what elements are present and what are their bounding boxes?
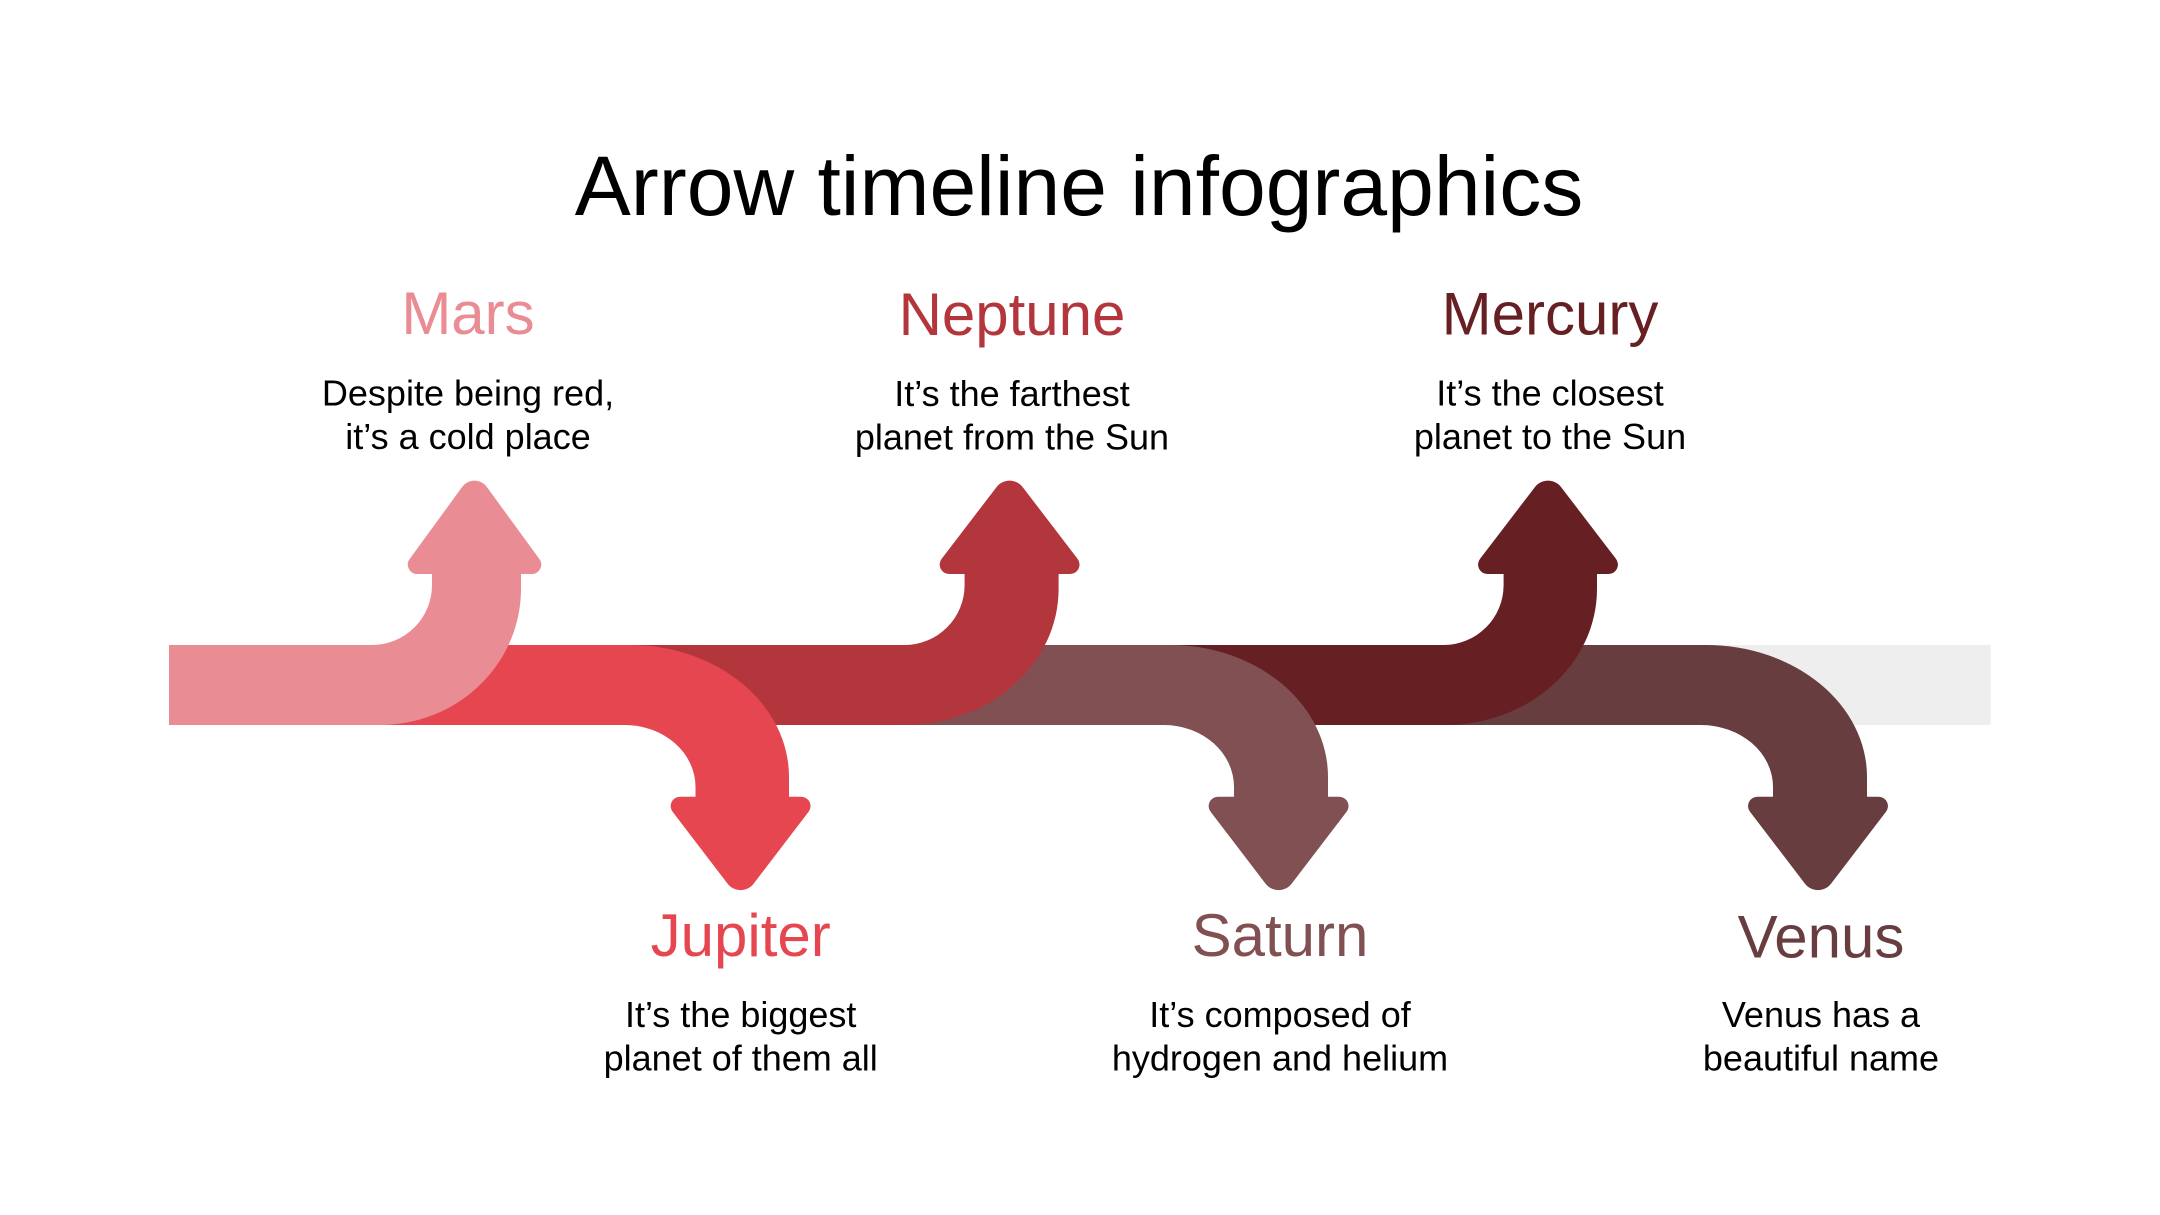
heading: Saturn: Saturn xyxy=(1192,902,1368,969)
label: Saturn xyxy=(1112,902,1448,1078)
heading: Neptune: Neptune xyxy=(899,281,1125,348)
label: Venus xyxy=(1703,904,1939,1078)
arrow: Mars xyxy=(169,481,541,725)
arrow: Jupiter xyxy=(300,645,811,890)
description: Mercury xyxy=(1414,372,1686,457)
heading: Venus: Venus xyxy=(1738,904,1904,970)
description: Jupiter: planet of them all xyxy=(604,1037,878,1078)
heading: Mercury: Mercury xyxy=(1442,280,1658,348)
title: Arrow timeline infographics xyxy=(575,139,1583,233)
arrow: Neptune xyxy=(600,481,1080,725)
description: Neptune: It’s the farthest xyxy=(894,373,1130,414)
label: Neptune xyxy=(855,281,1169,458)
description: Venus: beautiful name xyxy=(1703,1037,1939,1078)
heading: Jupiter: Jupiter xyxy=(651,902,831,969)
label: Mercury xyxy=(1414,280,1686,457)
description: Neptune: planet from the Sun xyxy=(855,416,1169,458)
description: Jupiter: It’s the biggest xyxy=(625,994,856,1035)
arrow: Mercury xyxy=(1150,481,1618,725)
description: Venus xyxy=(1703,994,1939,1078)
description: Saturn: hydrogen and helium xyxy=(1112,1037,1448,1078)
arrow: Saturn xyxy=(850,645,1349,890)
description: Mars: it’s a cold place xyxy=(345,416,591,457)
timeline background band xyxy=(169,645,1991,725)
description: Jupiter xyxy=(604,994,878,1078)
label: Mars xyxy=(322,280,614,457)
description: Mars xyxy=(322,372,614,457)
description: Saturn: It’s composed of xyxy=(1149,994,1412,1035)
heading: Mars: Mars xyxy=(401,280,535,347)
description: Venus: Venus has a xyxy=(1722,994,1921,1035)
arrow: Venus xyxy=(1400,645,1888,890)
description: Mercury: planet to the Sun xyxy=(1414,416,1686,457)
description: Saturn xyxy=(1112,994,1448,1078)
description: Mars: Despite being red, xyxy=(322,372,614,414)
description: Neptune xyxy=(855,373,1169,458)
label: Jupiter xyxy=(604,902,878,1078)
description: Mercury: It’s the closest xyxy=(1436,372,1664,414)
